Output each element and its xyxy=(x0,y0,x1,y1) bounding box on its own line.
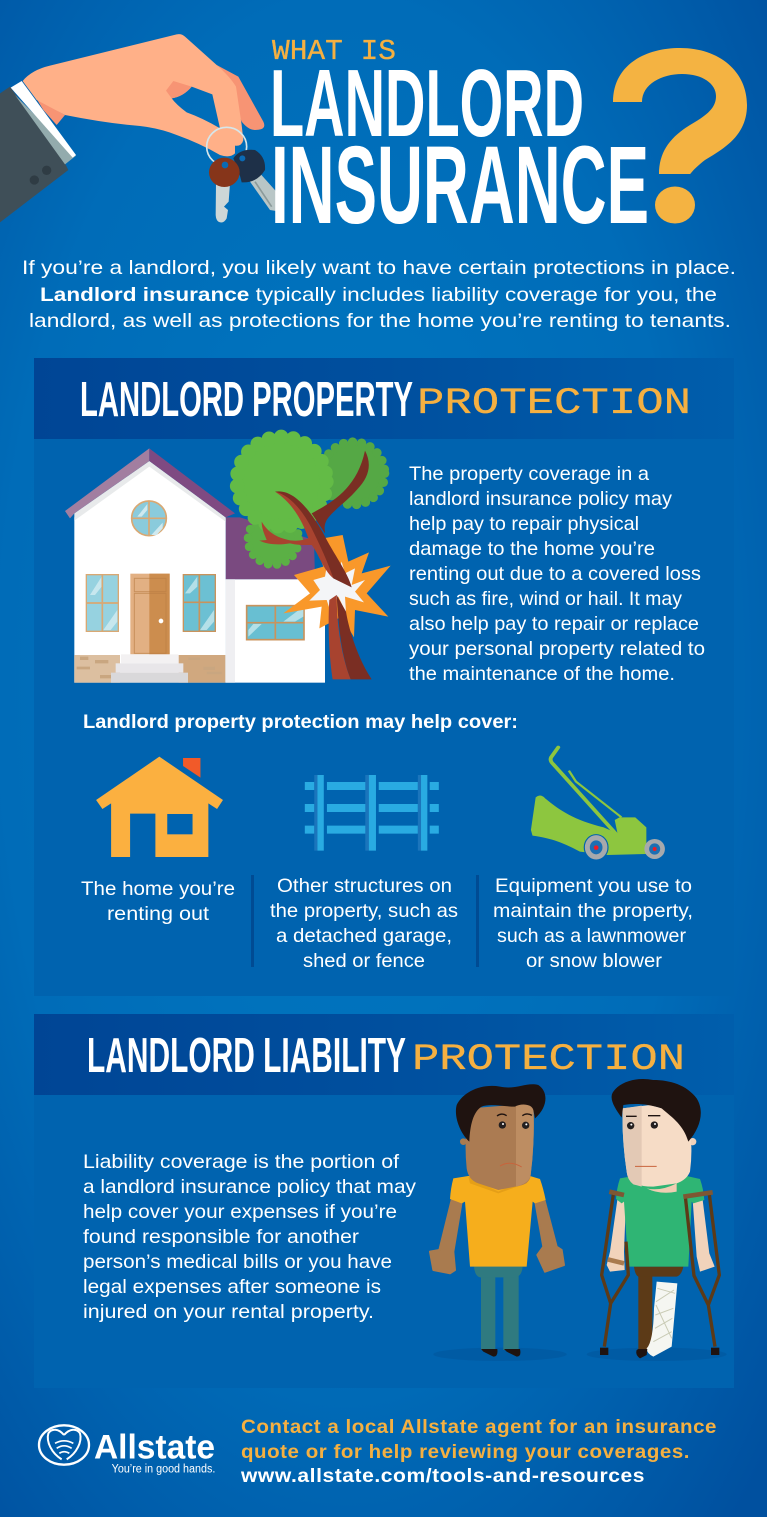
property coverage text: landlord insurance policy may xyxy=(409,488,672,510)
finger fold xyxy=(166,81,192,98)
person in yellow shirt xyxy=(430,1084,567,1361)
item: other structures xyxy=(270,875,458,972)
icon: house xyxy=(96,757,223,857)
title xyxy=(270,35,747,247)
question mark xyxy=(613,48,747,224)
icon: fence xyxy=(305,775,439,851)
section heading band xyxy=(34,1014,734,1095)
explosion xyxy=(283,535,391,637)
icon: lawnmower xyxy=(531,747,665,860)
property coverage text: damage to the home you’re xyxy=(409,538,655,560)
item: equipment: maintain the property, xyxy=(493,900,693,922)
footer call to action xyxy=(240,1417,717,1487)
item: other structures: the property, such as xyxy=(270,900,458,922)
allstate logo xyxy=(39,1425,215,1476)
logo tagline: You’re in good hands. xyxy=(112,1462,215,1476)
intro text: Landlord insurance typically includes liability coverage for you, the xyxy=(40,284,717,306)
intro text: landlord, as well as protections for the home you’re renting to tenants. xyxy=(29,310,731,332)
key ring xyxy=(207,127,247,166)
property coverage text: renting out due to a covered loss xyxy=(409,563,701,585)
brown key xyxy=(209,158,240,222)
liability text: injured on your rental property. xyxy=(83,1301,374,1323)
panel: landlord liability protection xyxy=(34,1014,734,1388)
illustration: two people xyxy=(430,1079,727,1361)
item: home xyxy=(81,878,235,925)
tree trunk and branches xyxy=(259,451,372,679)
person with crutches and cast xyxy=(587,1079,727,1361)
dark key xyxy=(233,150,282,212)
item: equipment: Equipment you use to xyxy=(495,875,692,897)
item: equipment: such as a lawnmower xyxy=(497,925,687,947)
logo mark: good hands xyxy=(39,1425,89,1465)
item: home: The home you’re xyxy=(81,878,235,900)
back finger xyxy=(217,65,264,130)
liability text: person’s medical bills or you have xyxy=(83,1251,392,1273)
footer call to action: www.allstate.com/tools-and-resources xyxy=(240,1466,645,1487)
panel: landlord property protection xyxy=(34,358,734,996)
tree canopy xyxy=(237,437,385,565)
property coverage text: such as fire, wind or hail. It may xyxy=(409,588,682,610)
footer call to action: Contact a local Allstate agent for an insurance xyxy=(241,1417,717,1438)
what is: WHAT IS xyxy=(272,35,396,68)
property coverage text: the maintenance of the home. xyxy=(409,663,675,685)
liability text: help cover your expenses if you’re xyxy=(83,1201,397,1223)
item: other structures: Other structures on xyxy=(277,875,452,897)
liability text: legal expenses after someone is xyxy=(83,1276,381,1298)
sleeve xyxy=(0,81,76,222)
footer call to action: quote or for help reviewing your coverages. xyxy=(241,1442,690,1463)
intro text xyxy=(22,257,736,332)
property coverage text: your personal property related to xyxy=(409,638,705,660)
property coverage text: also help pay to repair or replace xyxy=(409,613,699,635)
section heading: PROTECTION xyxy=(412,1039,685,1081)
item: other structures: shed or fence xyxy=(303,950,425,972)
liability text: Liability coverage is the portion of xyxy=(83,1151,400,1173)
hand xyxy=(23,34,243,156)
intro text: If you’re a landlord, you likely want to have certain protections in place. xyxy=(22,257,736,279)
section heading band xyxy=(34,358,734,439)
section heading: PROTECTION xyxy=(417,383,691,425)
item: other structures: a detached garage, xyxy=(276,925,452,947)
item: equipment xyxy=(493,875,693,972)
explosion core xyxy=(309,562,365,613)
item: equipment: or snow blower xyxy=(526,950,663,972)
property coverage text: The property coverage in a xyxy=(409,463,649,485)
subheading: Landlord property protection may help cover: xyxy=(83,711,518,733)
property coverage text xyxy=(409,463,705,685)
illustration: house with fallen tree xyxy=(65,437,391,683)
liability text: a landlord insurance policy that may xyxy=(83,1176,416,1198)
liability text xyxy=(83,1151,416,1323)
property coverage text: help pay to repair physical xyxy=(409,513,639,535)
item: home: renting out xyxy=(107,903,210,925)
liability text: found responsible for another xyxy=(83,1226,360,1248)
house xyxy=(65,448,325,683)
illustration: hand holding keys xyxy=(0,34,282,222)
section heading: LANDLORD PROPERTY xyxy=(80,373,413,427)
section heading: LANDLORD LIABILITY xyxy=(87,1029,406,1083)
logo wordmark: Allstate xyxy=(94,1428,215,1466)
